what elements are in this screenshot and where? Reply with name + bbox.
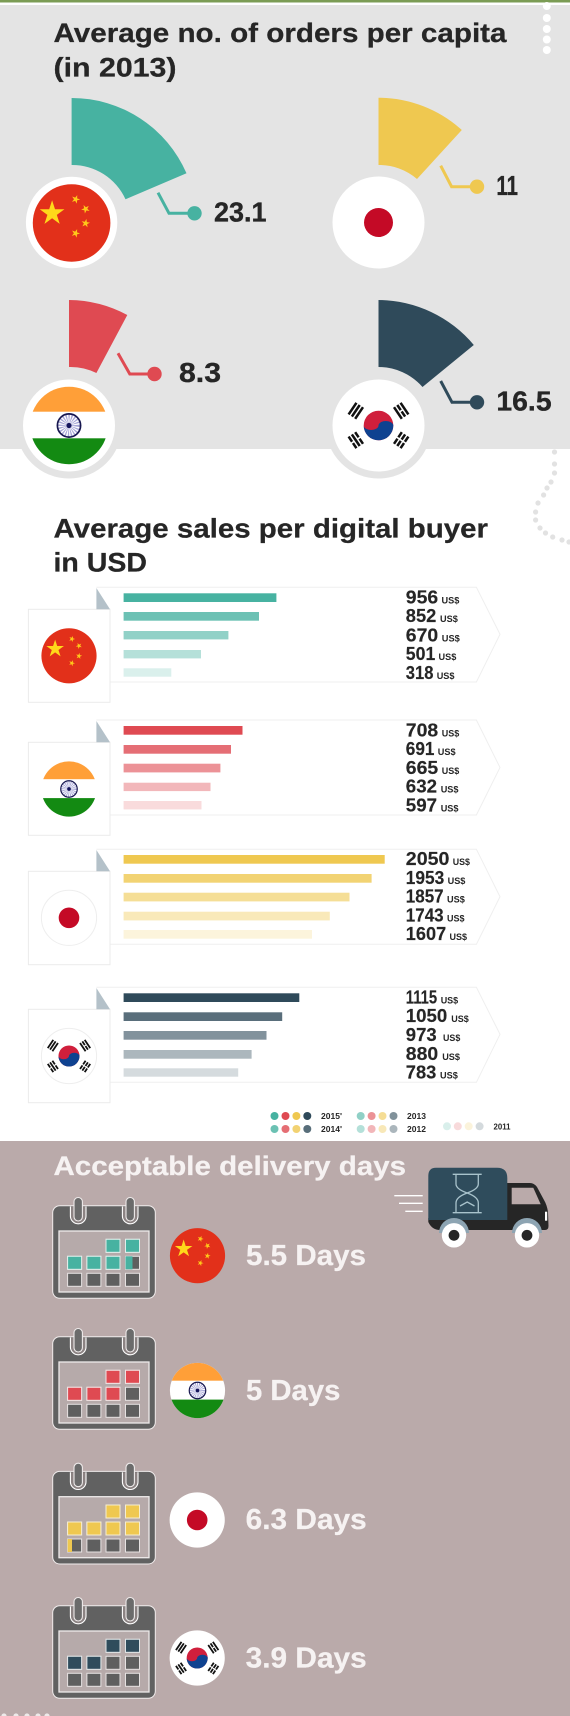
chart: Japan sales bars: 1743 xyxy=(406,906,444,926)
heading: sales per digital buyer: Average sales per digital buyer xyxy=(54,513,489,543)
chart: India sales bars: US$ xyxy=(441,804,459,815)
chart: Japan sales bars: 1953 xyxy=(406,868,444,888)
chart: Korea sales bars: 880 xyxy=(406,1044,438,1064)
row: Korea delivery days xyxy=(53,1598,367,1698)
panel: acceptable delivery days xyxy=(0,1141,570,1716)
chart: Japan sales bars: 1857 xyxy=(406,887,444,907)
chart: India sales bars: 691 xyxy=(406,739,434,759)
row: Japan delivery days: 6.3 Days xyxy=(246,1504,367,1536)
chart: India sales bars: US$ xyxy=(442,766,460,777)
chart: India sales bars: US$ xyxy=(442,728,460,739)
chart: Korea sales bars: US$ xyxy=(443,1033,461,1044)
heading: sales per digital buyer xyxy=(54,513,489,578)
chart: India sales bars: 597 xyxy=(406,796,437,816)
chart: India sales bars: 665 xyxy=(406,758,438,778)
chart: India sales bars xyxy=(28,720,500,835)
chart: Japan sales bars: 2050 xyxy=(406,849,449,869)
row: Japan delivery days xyxy=(53,1463,367,1564)
row: India delivery days: 5 Days xyxy=(246,1375,340,1407)
chart: Japan orders fan: 11 xyxy=(496,170,518,201)
chart: India sales bars: US$ xyxy=(441,785,459,796)
chart: Korea sales bars: US$ xyxy=(440,1071,458,1082)
chart: China sales bars: 501 xyxy=(406,644,435,664)
row: Korea delivery days: 3.9 Days xyxy=(246,1643,367,1675)
chart: Japan sales bars: 1607 xyxy=(406,924,446,944)
chart: China sales bars: US$ xyxy=(438,652,457,663)
chart: China sales bars: 318 xyxy=(406,663,433,683)
chart: China sales bars: US$ xyxy=(442,633,460,644)
legend: years: 2011 xyxy=(494,1121,511,1131)
chart: Korea sales bars: 783 xyxy=(406,1063,436,1083)
legend: years xyxy=(270,1111,511,1134)
chart: Korea sales bars: 1115 xyxy=(406,987,437,1007)
chart: China sales bars: 956 xyxy=(406,587,438,607)
row: China delivery days: 5.5 Days xyxy=(246,1240,366,1272)
chart: Japan sales bars xyxy=(28,849,500,965)
chart: Korea sales bars xyxy=(28,987,500,1103)
legend: years: 2014' xyxy=(321,1124,342,1134)
chart: India orders fan: 8.3 xyxy=(179,357,221,388)
chart: Japan sales bars: US$ xyxy=(447,895,465,906)
icon: calendar Korea xyxy=(53,1598,155,1698)
chart: Japan orders fan xyxy=(332,98,518,268)
chart: Korea orders fan: 16.5 xyxy=(496,386,552,417)
heading: delivery days: Acceptable delivery days xyxy=(54,1151,406,1181)
chart: China orders fan xyxy=(26,98,267,268)
chart: China sales bars: 670 xyxy=(406,625,438,645)
chart: China sales bars: 852 xyxy=(406,606,436,626)
chart: China sales bars: US$ xyxy=(440,614,458,625)
legend: years: 2013 xyxy=(407,1111,426,1121)
icon: calendar Japan xyxy=(53,1463,155,1564)
chart: China sales bars: US$ xyxy=(442,595,460,606)
chart: Japan sales bars: US$ xyxy=(448,876,466,887)
chart: Korea sales bars: US$ xyxy=(442,1052,461,1063)
chart: Korea sales bars: 1050 xyxy=(406,1006,447,1026)
chart: Korea sales bars: US$ xyxy=(451,1014,469,1025)
chart: India sales bars: US$ xyxy=(438,747,456,758)
legend: years: 2015' xyxy=(321,1111,342,1121)
chart: India orders fan xyxy=(16,300,221,478)
icon: calendar China xyxy=(53,1198,155,1298)
chart: Korea sales bars: 973 xyxy=(406,1025,437,1045)
legend: years: 2012 xyxy=(407,1124,426,1134)
chart: Korea sales bars: US$ xyxy=(441,995,459,1006)
chart: Japan sales bars: US$ xyxy=(450,932,468,943)
top accent strip xyxy=(0,0,570,2)
chart: China sales bars xyxy=(28,587,500,702)
chart: India sales bars: 632 xyxy=(406,777,437,797)
chart: Japan sales bars: US$ xyxy=(447,914,465,925)
row: China delivery days xyxy=(53,1198,366,1298)
chart: India sales bars: 708 xyxy=(406,720,438,740)
chart: Korea orders fan xyxy=(326,300,552,478)
heading: orders per capita xyxy=(54,18,508,82)
panel: average orders per capita xyxy=(0,5,570,478)
chart: Japan sales bars: US$ xyxy=(453,857,471,868)
panel: average sales per digital buyer xyxy=(28,513,511,1134)
heading: sales per digital buyer: in USD xyxy=(54,548,147,578)
icon: calendar India xyxy=(53,1328,155,1429)
heading: orders per capita: (in 2013) xyxy=(54,52,176,82)
chart: China orders fan: 23.1 xyxy=(214,197,266,228)
heading: orders per capita: Average no. of orders per capita xyxy=(54,18,508,48)
chart: China sales bars: US$ xyxy=(437,671,455,682)
icon: delivery truck with hourglass xyxy=(394,1168,548,1248)
row: India delivery days xyxy=(53,1328,340,1429)
